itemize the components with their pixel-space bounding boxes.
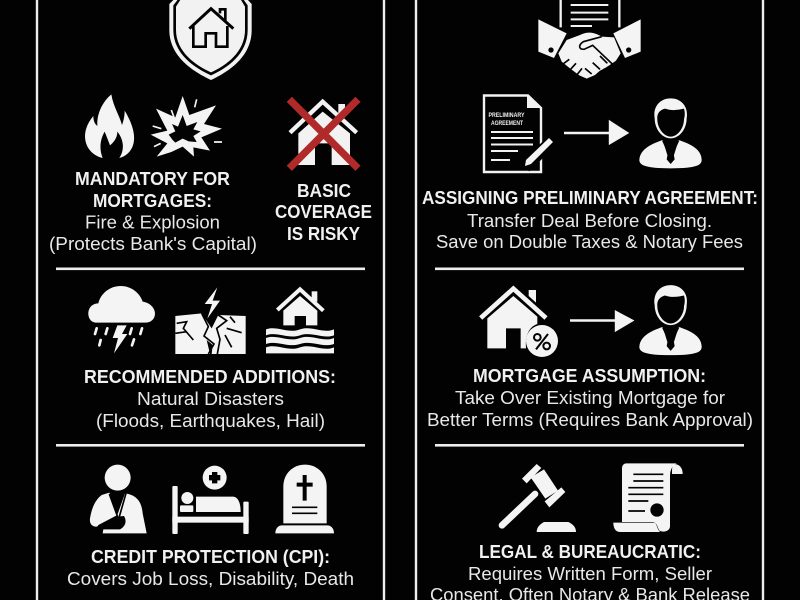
icon: injured person xyxy=(90,465,147,533)
icon: buyer xyxy=(639,98,702,168)
icon: storm cloud xyxy=(88,286,155,353)
text: floods earthquakes hail: (Floods, Earthquakes, Hail) xyxy=(96,411,325,431)
icon: crossed-out house xyxy=(289,99,358,168)
text: natural disasters: Natural Disasters xyxy=(137,389,284,409)
icon: hospital bed xyxy=(172,466,249,534)
text: take over mortgage: Take Over Existing Mortgage for xyxy=(455,388,725,408)
text: protects capital: (Protects Bank's Capital) xyxy=(49,234,257,254)
icon: earthquake xyxy=(175,287,246,354)
text: fire and explosion: Fire & Explosion xyxy=(85,212,220,232)
arrow: document to buyer xyxy=(564,122,627,143)
heading: coverage: COVERAGE xyxy=(275,202,372,222)
icon: fire xyxy=(85,94,134,158)
text: better terms: Better Terms (Requires Bank Approval) xyxy=(427,410,753,430)
icon: contract handshake xyxy=(538,0,641,79)
heading: mortgages: MORTGAGES: xyxy=(93,191,212,211)
panel: transfer xyxy=(416,0,763,600)
text: save on taxes: Save on Double Taxes & Notary Fees xyxy=(436,232,743,252)
icon: assuming person xyxy=(639,285,702,355)
icon: house with percent xyxy=(481,289,558,357)
icon: scroll with seal xyxy=(613,463,683,532)
icon: flooded house xyxy=(266,289,334,353)
text: document label line 2: AGREEMENT xyxy=(491,120,523,127)
arrow: house to assumer xyxy=(570,312,632,330)
text: transfer deal: Transfer Deal Before Closing. xyxy=(467,211,712,231)
icon: gavel xyxy=(502,464,576,532)
icon: house shield xyxy=(169,0,252,80)
text: document label line 1: PRELIMINARY xyxy=(488,112,525,119)
text: written form: Requires Written Form, Seller xyxy=(468,564,712,584)
text: covers job loss: Covers Job Loss, Disability, Death xyxy=(67,569,354,589)
heading: basic: BASIC xyxy=(297,181,351,201)
heading: is risky: IS RISKY xyxy=(287,224,360,244)
heading: mortgage assumption: MORTGAGE ASSUMPTION: xyxy=(473,366,706,386)
heading: legal and bureaucratic: LEGAL & BUREAUCRATIC: xyxy=(479,542,701,562)
heading: credit protection: CREDIT PROTECTION (CPI): xyxy=(91,547,330,567)
icon: preliminary agreement document xyxy=(484,95,553,172)
icon: explosion xyxy=(151,96,222,157)
heading: recommended additions: RECOMMENDED ADDITIONS: xyxy=(84,367,336,387)
heading: assigning preliminary agreement: ASSIGNING PRELIMINARY AGREEMENT: xyxy=(422,188,758,208)
heading: mandatory for mortgages: MANDATORY FOR xyxy=(75,169,230,189)
icon: gravestone xyxy=(275,465,334,533)
panel: insurance xyxy=(37,0,384,600)
